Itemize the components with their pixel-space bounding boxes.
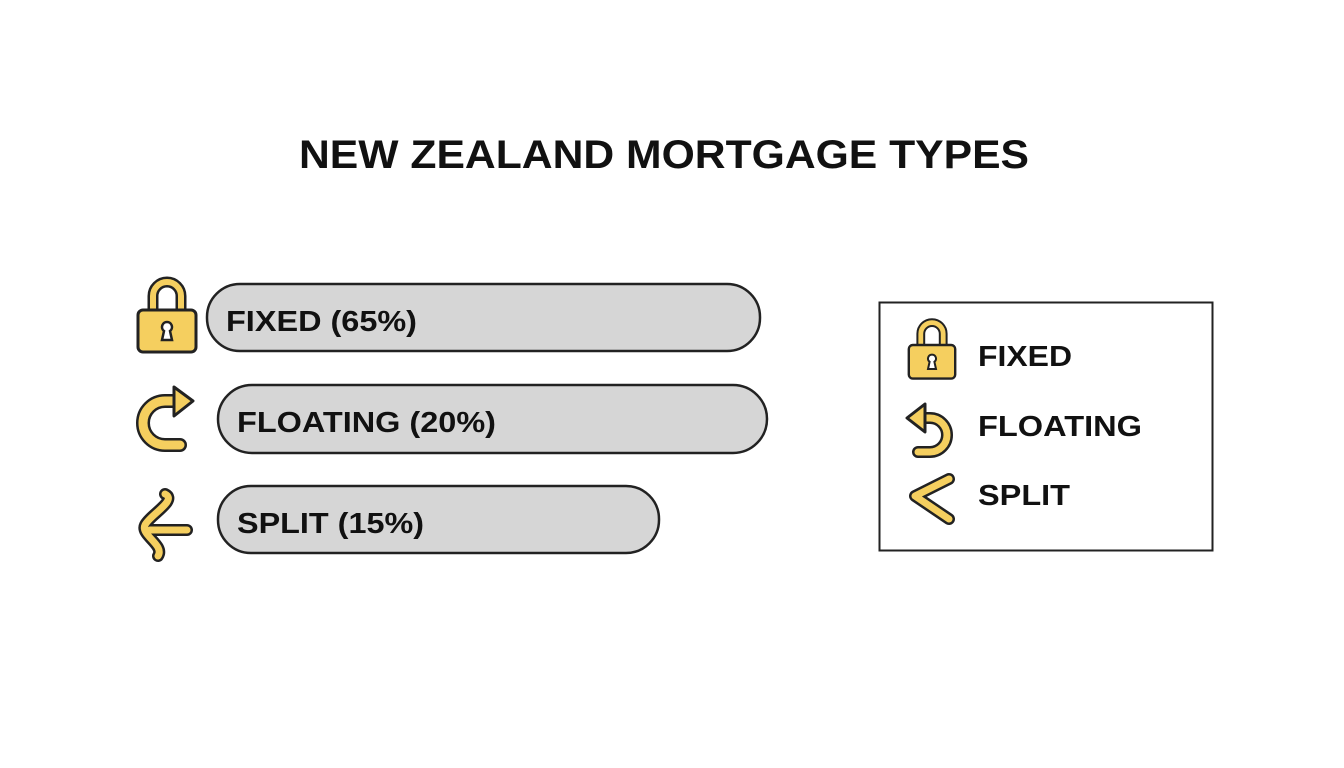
icon: lock bbox=[138, 282, 196, 352]
title: NEW ZEALAND MORTGAGE TYPES bbox=[299, 133, 1029, 177]
row: fixed bbox=[138, 282, 760, 352]
row: floating bbox=[143, 385, 767, 453]
bar: floating bbox=[218, 385, 767, 453]
legend bbox=[880, 302, 1212, 550]
bar: fixed: FIXED (65%) bbox=[226, 306, 417, 338]
legend: floating: FLOATING bbox=[978, 411, 1142, 443]
legend: split bbox=[915, 479, 1070, 519]
legend: fixed bbox=[909, 323, 1072, 379]
icon: curved arrow bbox=[143, 387, 193, 445]
icon: split arrow bbox=[144, 494, 187, 556]
bar: split bbox=[218, 486, 659, 553]
bar: floating: FLOATING (20%) bbox=[237, 407, 496, 439]
legend: fixed: FIXED bbox=[978, 341, 1072, 373]
bar: split: SPLIT (15%) bbox=[237, 508, 424, 540]
legend: floating bbox=[907, 404, 1142, 452]
row: split bbox=[144, 486, 659, 556]
legend: split: SPLIT bbox=[978, 480, 1070, 512]
bar: fixed bbox=[207, 284, 760, 351]
